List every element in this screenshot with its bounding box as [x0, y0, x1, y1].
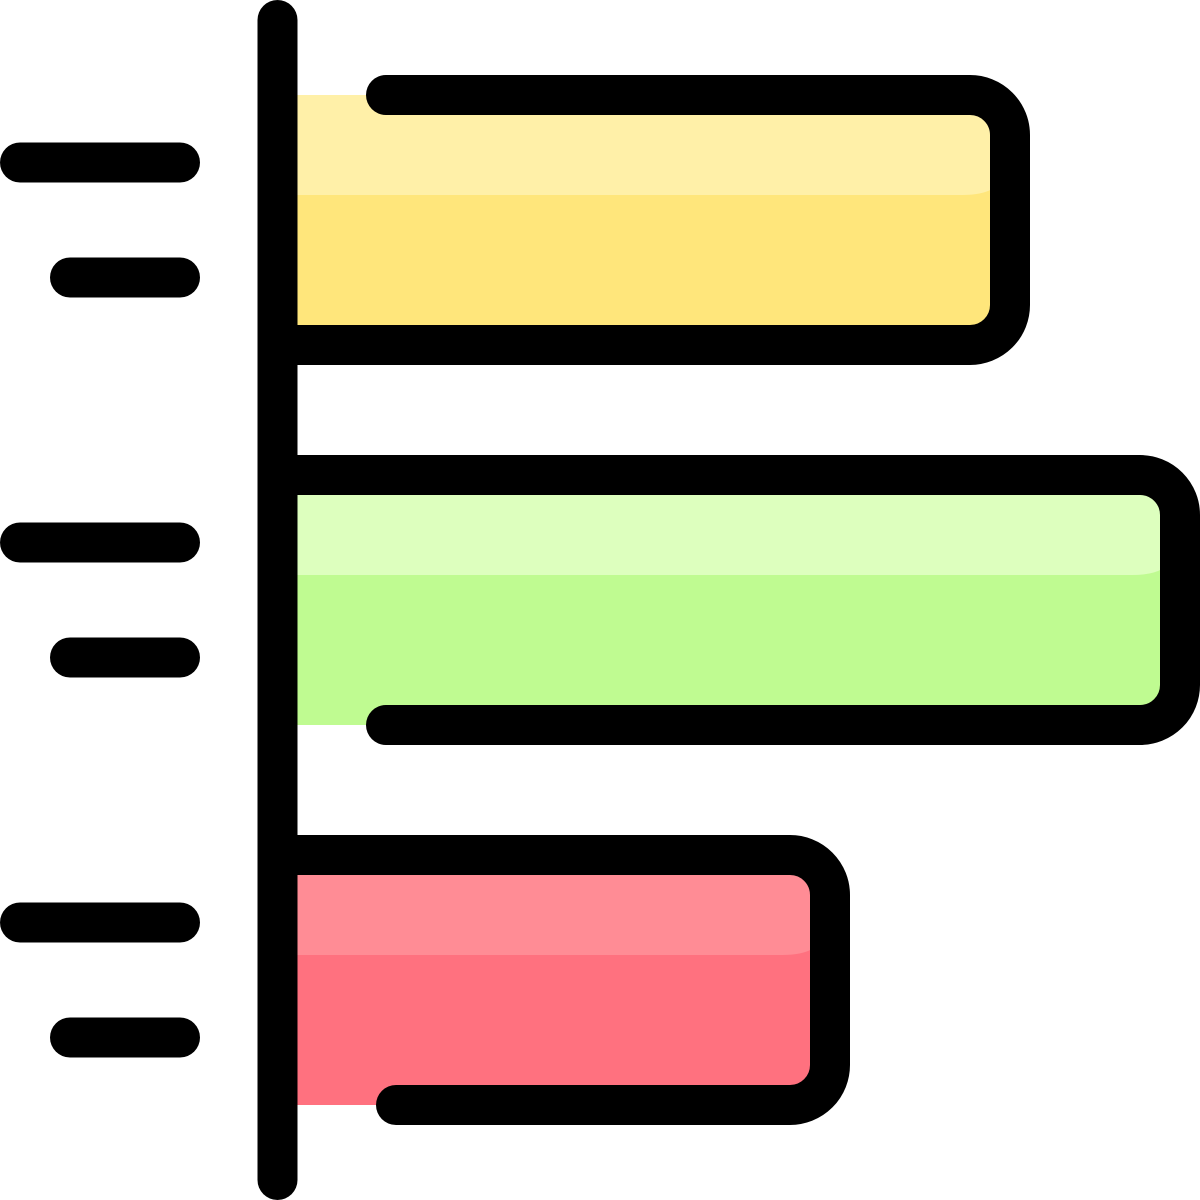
bar: green	[277, 475, 1180, 725]
label placeholder lines: yellow bar	[20, 162, 180, 278]
vertical axis	[258, 20, 298, 1180]
label placeholder lines: red bar	[20, 922, 180, 1038]
bar: red	[277, 855, 830, 1105]
label placeholder lines: green bar	[20, 542, 180, 658]
bar: yellow	[277, 95, 1010, 345]
